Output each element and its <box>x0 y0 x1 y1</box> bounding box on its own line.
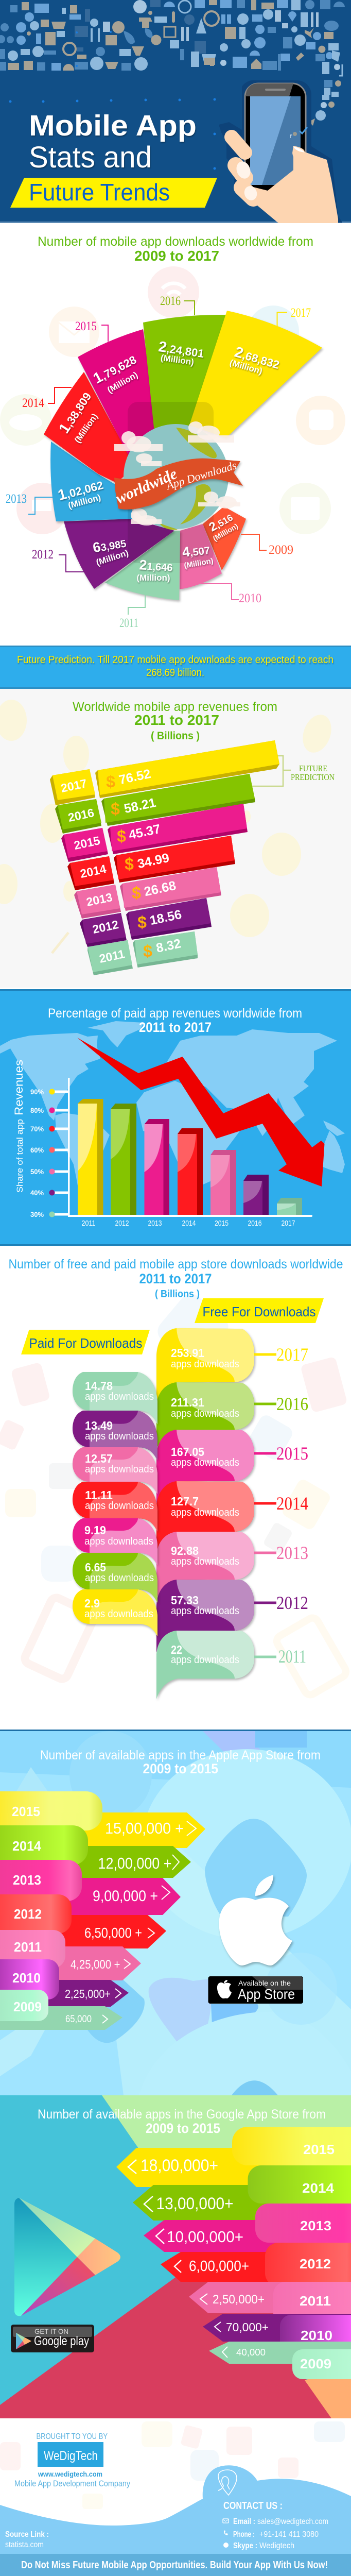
bracket: future prediction: FUTURE <box>299 764 327 773</box>
wedge: 2009 <box>203 506 246 570</box>
paid block values: 12.57 <box>85 1452 113 1465</box>
y axis ticks: 40% <box>30 1189 44 1197</box>
ribbon: 2014: 12,00,000 + <box>98 1854 172 1872</box>
bar: 2017: 76.52 <box>117 767 152 787</box>
paid block values: 14.78 <box>85 1379 113 1393</box>
background facets <box>0 1731 351 2095</box>
free block: 2016 <box>156 1382 254 1450</box>
y axis ticks: 30% <box>30 1210 44 1218</box>
heading: Percentage of paid app revenues worldwide from <box>48 1006 302 1021</box>
wedge: 2010 <box>180 524 222 589</box>
free block values: 167.05 <box>171 1445 204 1459</box>
panel: footer <box>0 2418 351 2576</box>
free block: 2017 <box>156 1328 254 1405</box>
bar: 2016: 2016 <box>67 806 95 824</box>
chart: radial downloads fan <box>44 311 322 600</box>
bar: 2016 share <box>243 1175 269 1216</box>
wedge values: (Million) <box>106 370 139 395</box>
ribbon: 2009 <box>0 1990 122 2030</box>
x axis <box>68 1215 312 1228</box>
year labels: 2013 <box>6 492 27 506</box>
callout: future prediction <box>0 646 351 689</box>
free block year labels: 2012 <box>276 1592 308 1613</box>
heading <box>8 1257 343 1300</box>
free block values: apps downloads <box>171 1408 239 1419</box>
badge: app store <box>208 1976 303 2004</box>
y axis ticks: 70% <box>30 1125 44 1133</box>
contact details: Phone : <box>233 2530 255 2539</box>
heading: 2011 to 2017 <box>139 1020 212 1035</box>
heading: 2009 to 2015 <box>146 2121 220 2136</box>
contact details: Email : <box>233 2517 255 2526</box>
bar: 2011 share <box>78 1099 103 1216</box>
free block: 2011 <box>156 1631 254 1699</box>
heading: 2011 to 2017 <box>139 1271 212 1286</box>
heading: ( Billions ) <box>155 1289 200 1300</box>
globe <box>114 421 240 530</box>
year labels: 2017 <box>291 306 311 320</box>
bar: 2014: $ <box>125 855 134 873</box>
free block year labels: 2013 <box>276 1543 308 1563</box>
paid block values: apps downloads <box>85 1572 154 1584</box>
bar: 2012 share <box>111 1104 136 1216</box>
wedge values: 4,507 <box>181 541 210 560</box>
free block values: apps downloads <box>171 1457 239 1468</box>
ribbon: 2010: 70,000+ <box>226 2320 269 2334</box>
ribbon: 2011: 2,50,000+ <box>213 2293 265 2307</box>
free block values: 253.91 <box>171 1346 204 1360</box>
panel: paid app revenue percentage <box>0 989 351 1246</box>
y axis label: Revenues <box>12 1060 25 1115</box>
badge: google play: GET IT ON <box>34 2327 68 2335</box>
icon: apple logo <box>219 1875 292 1965</box>
ribbon: 2014: 2014 <box>302 2180 335 2196</box>
bar: 2014 share <box>178 1128 203 1216</box>
wedge values: (Million) <box>229 358 264 376</box>
ribbon: 2010 <box>203 2314 351 2360</box>
label: paid for downloads: Paid For Downloads <box>29 1335 142 1351</box>
year labels <box>6 294 311 630</box>
bar: 2011 <box>87 931 198 975</box>
badge: app store: App Store <box>238 1986 295 2002</box>
paid block: 2012 <box>73 1553 157 1603</box>
paid block values: apps downloads <box>84 1536 153 1547</box>
free block year labels: 2015 <box>276 1443 308 1464</box>
ribbon: 2011: 2011 <box>300 2293 331 2309</box>
ribbon: 2009: 40,000 <box>236 2347 266 2358</box>
ribbon: 2014: 2014 <box>12 1838 42 1854</box>
free block: 2012 <box>156 1580 254 1652</box>
paid block: 2014 <box>73 1482 157 1532</box>
paid block values: apps downloads <box>85 1464 154 1475</box>
label: paid for downloads <box>21 1330 150 1354</box>
bar: 2013 share <box>144 1119 169 1216</box>
title: Mobile App <box>29 109 197 142</box>
year labels: 2016 <box>160 294 181 308</box>
bar: 2016: $ <box>111 800 120 818</box>
icon: play store logo <box>14 2198 120 2316</box>
heading <box>38 2107 326 2136</box>
ribbon: 2012 <box>161 2243 351 2286</box>
paid block values: apps downloads <box>85 1391 154 1402</box>
heading: Number of mobile app downloads worldwide from <box>38 234 313 249</box>
wedge: 2016 <box>143 315 226 433</box>
bar: 2015 <box>61 804 248 862</box>
y axis label <box>12 1060 25 1193</box>
heading: 2011 to 2017 <box>134 712 219 728</box>
free block values: apps downloads <box>171 1359 239 1370</box>
contact details: +91-141 411 3080 <box>259 2530 319 2539</box>
paid block values: 13.49 <box>85 1419 113 1432</box>
badge: app store: Available on the <box>238 1979 291 1987</box>
x axis: 2011 <box>81 1219 96 1228</box>
wedge values: 2,516 <box>207 510 235 534</box>
wedge: 2012 <box>64 519 174 589</box>
source link <box>5 2530 49 2549</box>
badge: google play <box>11 2325 94 2352</box>
contact details: Wedigtech <box>259 2541 294 2550</box>
ribbon: 2010: 2010 <box>12 1970 41 1986</box>
ribbon: 2009: 2009 <box>300 2356 331 2371</box>
ribbon: 2012: 6,00,000+ <box>189 2258 249 2275</box>
faint phone overlay <box>128 402 214 563</box>
y axis ticks: 90% <box>30 1088 44 1096</box>
ribbon: 2011: 2011 <box>14 1939 42 1955</box>
free block values: 22 <box>171 1643 182 1656</box>
wedge values: (Million) <box>73 412 100 445</box>
ribbon: 2013: 9,00,000 + <box>93 1888 158 1905</box>
heading <box>38 234 313 264</box>
ribbon: 2009 <box>209 2342 351 2379</box>
contact details: sales@wedigtech.com <box>257 2517 328 2526</box>
year labels: 2011 <box>119 616 138 630</box>
bracket: future prediction <box>252 756 335 786</box>
ribbon: 2011 <box>0 1930 141 1980</box>
paid block values: apps downloads <box>85 1431 154 1442</box>
year labels: 2009 <box>269 543 293 557</box>
bar: 2012: 2012 <box>91 918 120 936</box>
heading <box>40 1748 321 1776</box>
wedge: 2015 <box>78 329 157 456</box>
bar: 2012: $ <box>137 913 147 931</box>
bar: 2011: $ <box>143 942 152 960</box>
bar: 2011: 2011 <box>98 947 126 965</box>
heading: ( Billions ) <box>151 730 200 742</box>
bar: 2013: $ <box>132 884 141 902</box>
source link: Source Link : <box>5 2530 49 2539</box>
bar: 2013: 26.68 <box>143 878 178 899</box>
free block: 2013 <box>156 1532 254 1600</box>
bar: 2017: 2017 <box>60 776 88 795</box>
brought to you by: www.wedigtech.com <box>38 2470 102 2478</box>
year labels: 2010 <box>239 591 261 605</box>
ribbon: 2009: 2009 <box>13 1999 42 2014</box>
panel: hero <box>0 0 351 223</box>
year leaders <box>28 301 287 615</box>
paid block values: 2.9 <box>84 1597 100 1610</box>
ribbon: 2009: 65,000 <box>65 2014 92 2025</box>
ribbon: 2013: 10,00,000+ <box>167 2228 243 2246</box>
arrow: falling trend <box>77 1038 324 1187</box>
bar: 2015: $ <box>117 827 126 845</box>
wedge values: (Million) <box>160 353 195 367</box>
panel: free and paid downloads <box>0 1246 351 1730</box>
source link: statista.com <box>5 2540 44 2549</box>
bar: 2014: 2014 <box>79 862 108 880</box>
label: free for downloads <box>195 1298 324 1323</box>
bar: 2013: 2013 <box>85 890 114 909</box>
paid block values: 6.65 <box>85 1561 106 1574</box>
bar: 2017 share <box>277 1198 302 1216</box>
paid block: 2013 <box>73 1518 157 1565</box>
faint app icons <box>0 2421 345 2509</box>
ribbon: 2010: 2010 <box>301 2328 332 2343</box>
paid block values <box>84 1379 154 1620</box>
contact details: Skype : <box>233 2541 257 2550</box>
paid block values: apps downloads <box>85 1500 154 1512</box>
icon: contact pin <box>218 2470 237 2495</box>
title: Stats and <box>29 141 152 174</box>
bar: 2011: 8.32 <box>155 936 182 956</box>
ribbon: 2012 <box>0 1894 166 1948</box>
title: Future Trends <box>29 179 170 206</box>
ribbon: 2014: 13,00,000+ <box>156 2194 234 2213</box>
bar: 2015: 2015 <box>73 834 101 852</box>
x axis: 2012 <box>115 1219 129 1228</box>
bar: 2016: 58.21 <box>122 795 157 816</box>
y axis ticks: 80% <box>30 1106 44 1114</box>
paid block: 2017 <box>73 1372 157 1425</box>
y axis ticks: 50% <box>30 1167 44 1176</box>
contact details: CONTACT US : <box>223 2500 283 2512</box>
x axis: 2016 <box>248 1219 261 1228</box>
free block values: apps downloads <box>171 1654 239 1666</box>
callout: future prediction: 268.69 billion. <box>146 667 204 679</box>
wedge: 2017 <box>189 311 322 438</box>
brought to you by: Mobile App Development Company <box>14 2479 130 2488</box>
free block year labels: 2014 <box>276 1493 308 1514</box>
banner: worldwide app downloads <box>113 459 243 510</box>
heading: Number of available apps in the Apple App Store from <box>40 1748 321 1762</box>
ribbon: 2010 <box>0 1959 129 2007</box>
decorative dots <box>9 31 216 170</box>
wedge values: (Million) <box>136 573 170 583</box>
free block values: 92.88 <box>171 1544 199 1557</box>
paid block: 2016 <box>73 1411 157 1461</box>
faint icon circles <box>0 266 345 534</box>
panel: mobile app downloads <box>0 234 345 630</box>
ribbon: 2012: 2012 <box>300 2256 331 2272</box>
ribbon: 2012: 2012 <box>14 1906 42 1922</box>
bar: 2016 <box>55 774 255 834</box>
wedge: 2013 <box>50 442 132 521</box>
faint app icons <box>0 1290 348 1697</box>
free block: 2014 <box>156 1481 254 1553</box>
wedge values: (Million) <box>212 522 239 543</box>
free block values: apps downloads <box>171 1507 239 1518</box>
bar: 2014 <box>67 836 235 890</box>
banner: worldwide app downloads: worldwide <box>113 465 180 507</box>
ribbon: 2011: 4,25,000 + <box>71 1958 120 1972</box>
heading <box>73 700 277 742</box>
title <box>10 109 217 208</box>
ribbon: 2013 <box>0 1860 181 1915</box>
ribbon: 2013: 2013 <box>300 2218 331 2233</box>
year labels: 2014 <box>22 396 44 410</box>
paid block values: 11.11 <box>85 1488 113 1502</box>
panel: google app store <box>0 2095 351 2418</box>
coins background <box>0 700 336 953</box>
ribbon: 2015: 18,00,000+ <box>141 2156 218 2175</box>
bar: 2017 <box>50 740 279 805</box>
ribbon: 2015 <box>0 1791 205 1848</box>
icon: phone in hand <box>219 80 342 223</box>
wedge values: 21,646 <box>139 557 173 574</box>
free block values: 127.7 <box>171 1495 199 1508</box>
wedge values: 2,24,801 <box>157 338 205 361</box>
bar: 2014: 34.99 <box>136 851 171 871</box>
wedge values: (Million) <box>183 556 214 570</box>
ribbon: 2013: 2013 <box>13 1872 41 1888</box>
x axis: 2015 <box>215 1219 229 1228</box>
paid block values: 9.19 <box>84 1523 106 1537</box>
ribbon: 2015 <box>116 2127 351 2187</box>
wedge: 2014 <box>44 372 139 483</box>
y axis ticks: 60% <box>30 1146 44 1154</box>
year labels: 2012 <box>32 548 54 562</box>
wedge values: 1,02,062 <box>56 476 105 504</box>
bar: 2017: $ <box>106 772 115 791</box>
free block year labels: 2017 <box>276 1344 308 1365</box>
wedge: 2011 <box>105 531 180 600</box>
free block values <box>171 1346 239 1666</box>
ribbon: 2015: 2015 <box>303 2142 335 2157</box>
free block year labels: 2016 <box>276 1394 308 1414</box>
paid block: 2011 <box>73 1589 157 1636</box>
free block: 2015 <box>156 1430 254 1503</box>
panel: apple app store <box>0 1730 351 2095</box>
heading: Number of available apps in the Google App Store from <box>38 2107 326 2122</box>
label: free for downloads: Free For Downloads <box>203 1304 316 1319</box>
wedge values: (Million) <box>95 548 130 568</box>
ribbon: 2012: 6,50,000 + <box>84 1925 142 1941</box>
heading <box>48 1006 302 1035</box>
bar: 2015: 45.37 <box>127 822 162 842</box>
call to action <box>0 2554 351 2576</box>
ribbon: 2010: 2,25,000+ <box>65 1987 111 2001</box>
brought to you by <box>14 2432 130 2488</box>
x axis: 2014 <box>182 1219 196 1228</box>
free block year labels: 2011 <box>278 1646 306 1667</box>
ribbon: 2014 <box>0 1825 191 1878</box>
wedge values: 63,985 <box>92 535 127 555</box>
x axis: 2017 <box>281 1219 295 1228</box>
wedge values: (Million) <box>67 493 102 511</box>
panel: revenues <box>0 689 351 989</box>
bar: 2012: 18.56 <box>148 907 183 928</box>
bar: 2013 <box>74 867 221 919</box>
free block values: apps downloads <box>171 1605 239 1617</box>
y axis label: Share of total app <box>15 1119 25 1193</box>
brought to you by: WeDigTech <box>44 2449 98 2463</box>
banner: worldwide app downloads: App Downloads <box>164 459 238 493</box>
free block values: 57.33 <box>171 1594 199 1607</box>
ribbon: 2014 <box>133 2165 351 2221</box>
callout: future prediction: Future Prediction. Till 2017 mobile app downloads are expected to reach <box>17 654 334 666</box>
y axis ticks <box>30 1078 70 1218</box>
wedge values: 2,68,832 <box>233 344 282 372</box>
icon cluster: right app icons <box>133 0 345 126</box>
free block year labels <box>254 1344 308 1667</box>
contact details <box>223 2500 328 2550</box>
contact wave <box>0 2465 351 2555</box>
heading: Worldwide mobile app revenues from <box>73 700 277 714</box>
wedge values: 1,38,809 <box>56 389 95 436</box>
paid block values: apps downloads <box>84 1608 153 1620</box>
ribbon: 2011 <box>189 2282 351 2325</box>
world map <box>0 1021 345 1190</box>
free block values: apps downloads <box>171 1556 239 1567</box>
brought to you by: BROUGHT TO YOU BY <box>36 2432 108 2441</box>
icon cluster: left app icons <box>0 2 148 71</box>
wedge values <box>56 338 282 583</box>
bar: 2012 <box>80 898 212 947</box>
bracket: future prediction: PREDICTION <box>291 772 335 782</box>
heading: 2009 to 2015 <box>143 1761 218 1776</box>
badge: google play: Google play <box>34 2334 89 2348</box>
ribbon: 2015: 15,00,000 + <box>105 1819 184 1837</box>
ribbon: 2015: 2015 <box>12 1804 40 1819</box>
bar: 2015 share <box>210 1150 236 1216</box>
year labels: 2015 <box>75 319 97 333</box>
ribbon: 2013 <box>144 2204 351 2252</box>
paid block: 2015 <box>73 1447 157 1494</box>
clouds <box>114 421 240 526</box>
x axis: 2013 <box>148 1219 162 1228</box>
wedge values: 1,79,628 <box>91 351 139 387</box>
free block values: 211.31 <box>171 1396 204 1409</box>
heading: 2009 to 2017 <box>134 248 219 264</box>
